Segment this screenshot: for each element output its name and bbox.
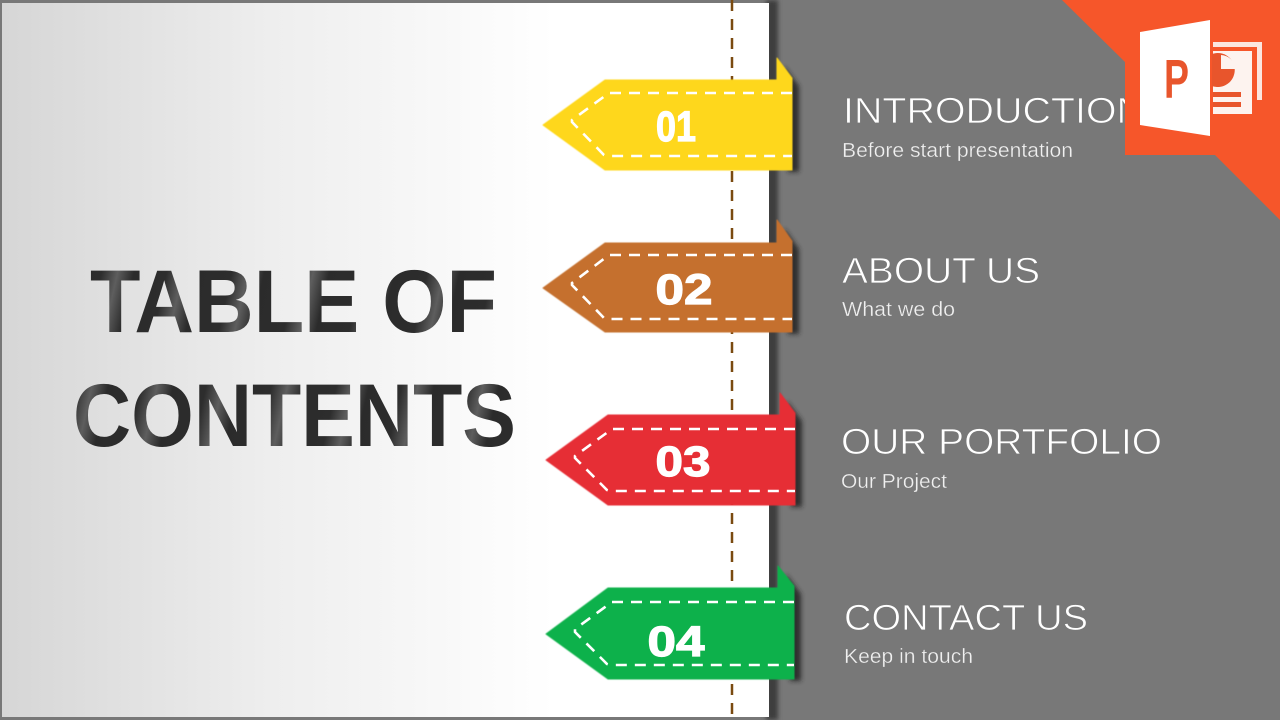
text block: contact us: [844, 597, 1088, 668]
text block: introduction: [842, 90, 1145, 162]
heading: table of contents: [73, 251, 516, 465]
text block: introduction: Before start presentation: [842, 140, 1073, 162]
text block: about us: What we do: [842, 299, 955, 321]
panel: left paper sheet: [2, 0, 778, 720]
text block: contact us: Keep in touch: [844, 646, 973, 668]
tag 01: yellow: [543, 58, 799, 172]
text block: contact us: CONTACT US: [844, 597, 1088, 638]
tag 03: red: 03: [656, 438, 710, 486]
heading: table of contents: TABLE OF: [90, 251, 497, 351]
icon: powerpoint logo corner: P: [1164, 48, 1189, 110]
tag 04: green: [546, 566, 801, 681]
text block: our portfolio: Our Project: [841, 471, 947, 493]
tag 02: brown: [543, 220, 799, 334]
text block: introduction: INTRODUCTION: [843, 90, 1145, 131]
dashed vertical stitch line: [731, 0, 733, 720]
heading: table of contents: CONTENTS: [73, 365, 516, 465]
tag 02: brown: 02: [656, 266, 712, 314]
tag 01: yellow: 01: [656, 103, 696, 151]
tag 03: red: [546, 393, 802, 507]
text block: about us: ABOUT US: [842, 250, 1040, 291]
text block: about us: [842, 250, 1040, 321]
tag 04: green: 04: [648, 618, 705, 666]
text block: our portfolio: [841, 421, 1162, 493]
text block: our portfolio: OUR PORTFOLIO: [841, 421, 1162, 462]
icon: powerpoint logo corner: [1062, 0, 1280, 220]
